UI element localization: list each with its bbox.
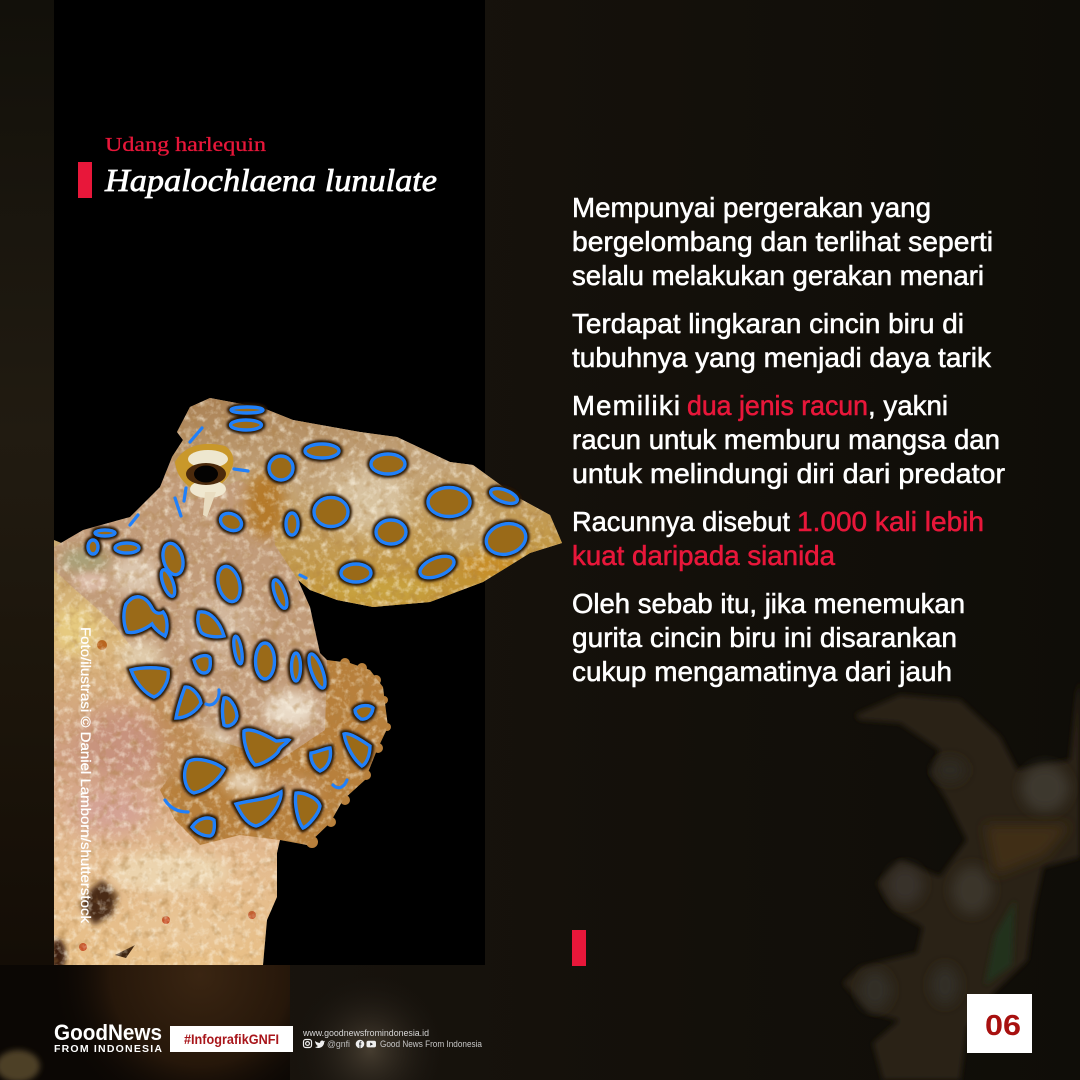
skin and rock grain (54, 395, 564, 967)
website: www.goodnewsfromindonesia.id (302, 1028, 429, 1038)
frilled edge bumps (292, 658, 391, 848)
body text (572, 192, 1005, 687)
paragraph: potency: kuat daripada sianida (572, 540, 836, 571)
lower frilled arm (160, 660, 388, 845)
paragraph: two venoms (572, 390, 1005, 489)
icon: twitter (315, 1040, 325, 1048)
page number (967, 994, 1032, 1053)
paragraph: advice: cukup mengamatinya dari jauh (572, 656, 952, 687)
paragraph: blue rings: Terdapat lingkaran cincin biru di (572, 308, 964, 339)
logo: GoodNews From Indonesia: FROM INDONESIA (54, 1043, 162, 1055)
hashtag tag: #InfografikGNFI (184, 1032, 279, 1047)
hashtag tag (170, 1026, 293, 1052)
page number: 06 (985, 1010, 1021, 1042)
icon: facebook (356, 1040, 364, 1048)
paragraph: movement: selalu melakukan gerakan menari (572, 260, 984, 291)
paragraph: potency: 1.000 kali lebih (797, 506, 984, 537)
blue rings (88, 407, 529, 836)
social links (302, 1028, 482, 1049)
lower accent bar (572, 930, 586, 966)
bottom left photo strip (0, 965, 290, 1080)
paragraph: potency: Racunnya disebut (572, 506, 790, 537)
background coral (843, 680, 1080, 1080)
handle: @gnfi (327, 1039, 350, 1049)
photo: blue-ringed octopus on rock (50, 395, 564, 971)
heading (78, 134, 437, 198)
paragraph: two venoms: , yakni (868, 390, 948, 421)
rock base (54, 540, 300, 965)
paragraph: two venoms: Memiliki (572, 390, 680, 421)
logo: GoodNews From Indonesia: GoodNews (54, 1020, 162, 1045)
paragraph: movement: Mempunyai pergerakan yang (572, 192, 931, 223)
page name: Good News From Indonesia (380, 1039, 482, 1049)
paragraph: two venoms: racun untuk memburu mangsa dan (572, 424, 1000, 455)
paragraph: two venoms: dua jenis racun (687, 390, 868, 421)
icon: youtube (366, 1041, 376, 1047)
black photo panel (54, 0, 485, 965)
paragraph: blue rings (572, 308, 991, 373)
icon: instagram (304, 1040, 312, 1048)
paragraph: movement (572, 192, 993, 291)
logo: GoodNews From Indonesia (54, 1020, 162, 1055)
bottom middle fog (290, 965, 485, 1080)
photo credit: Foto/ilustrasi © Daniel Lamborn/shutterstock (78, 627, 94, 924)
paragraph: two venoms: untuk melindungi diri dari predator (572, 458, 1005, 489)
eye (175, 444, 233, 517)
subtitle: Udang harlequin (105, 134, 266, 156)
paragraph: advice: Oleh sebab itu, jika menemukan (572, 588, 965, 619)
small blue marks (130, 428, 347, 812)
paragraph: blue rings: tubuhnya yang menjadi daya tarik (572, 342, 991, 373)
paragraph: potency (572, 506, 984, 571)
body and rock colour patches (50, 468, 522, 971)
paragraph: advice: gurita cincin biru ini disarankan (572, 622, 957, 653)
paragraph: advice (572, 588, 965, 687)
dark ring halos (88, 407, 529, 836)
heading accent bar (78, 162, 92, 198)
species name: Hapalochlaena lunulate (104, 162, 437, 198)
mantle and arms (54, 398, 562, 780)
paragraph: movement: bergelombang dan terlihat seperti (572, 226, 993, 257)
